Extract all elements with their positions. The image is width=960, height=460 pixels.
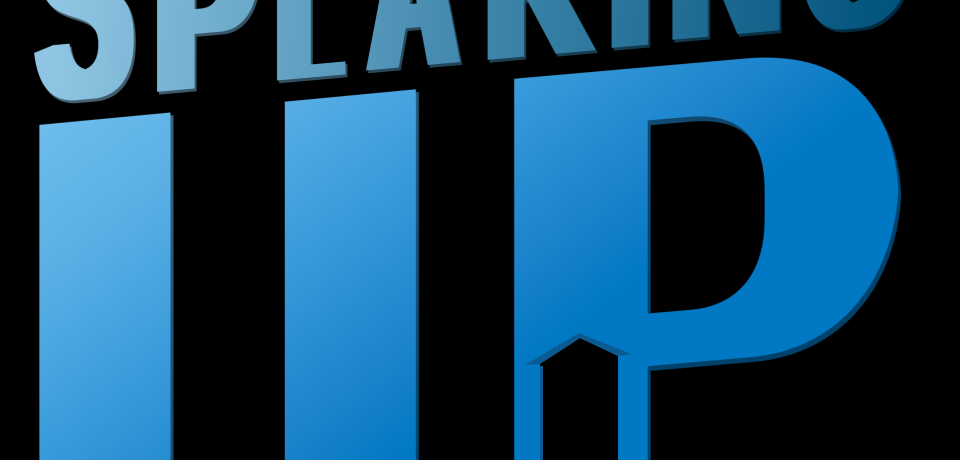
gradient tint: SPEAKING [0, 0, 960, 122]
icon: house cut-out arrow in the P [525, 333, 631, 460]
logo word: SPEAKING [38, 0, 902, 167]
